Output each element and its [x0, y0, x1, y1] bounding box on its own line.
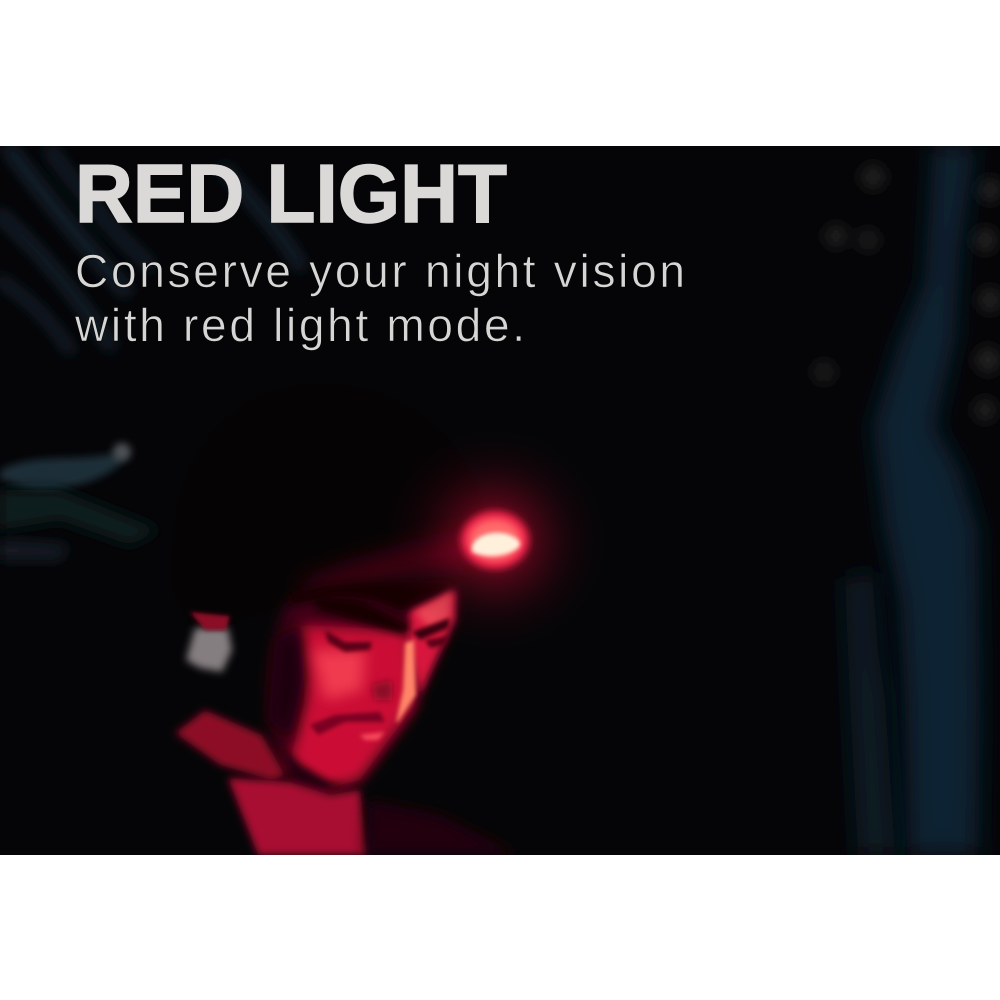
- beard: [280, 745, 345, 792]
- forehead highlight: [415, 590, 452, 628]
- subheading text: with red light mode.: [74, 299, 525, 351]
- beanie hat: [171, 384, 490, 629]
- second trunk: [845, 570, 895, 855]
- headlamp red glow: [408, 451, 584, 628]
- subheading text: Conserve your night vision: [75, 245, 685, 297]
- heading: RED LIGHT: RED LIGHT: [75, 147, 507, 240]
- nose: [396, 640, 416, 722]
- tree trunk: [873, 146, 980, 855]
- top shadow under hat: [290, 582, 456, 612]
- photo panel: man wearing red headlamp at night: [0, 146, 1000, 855]
- subheading text: [74, 245, 685, 351]
- hair and ear: [186, 612, 232, 672]
- mustache and mouth: [310, 712, 385, 735]
- face lit by red light: [268, 582, 457, 792]
- eyebrows: [312, 596, 410, 635]
- eyes: [325, 630, 372, 652]
- neck and shirt: [175, 710, 520, 855]
- background foliage: [0, 150, 1000, 560]
